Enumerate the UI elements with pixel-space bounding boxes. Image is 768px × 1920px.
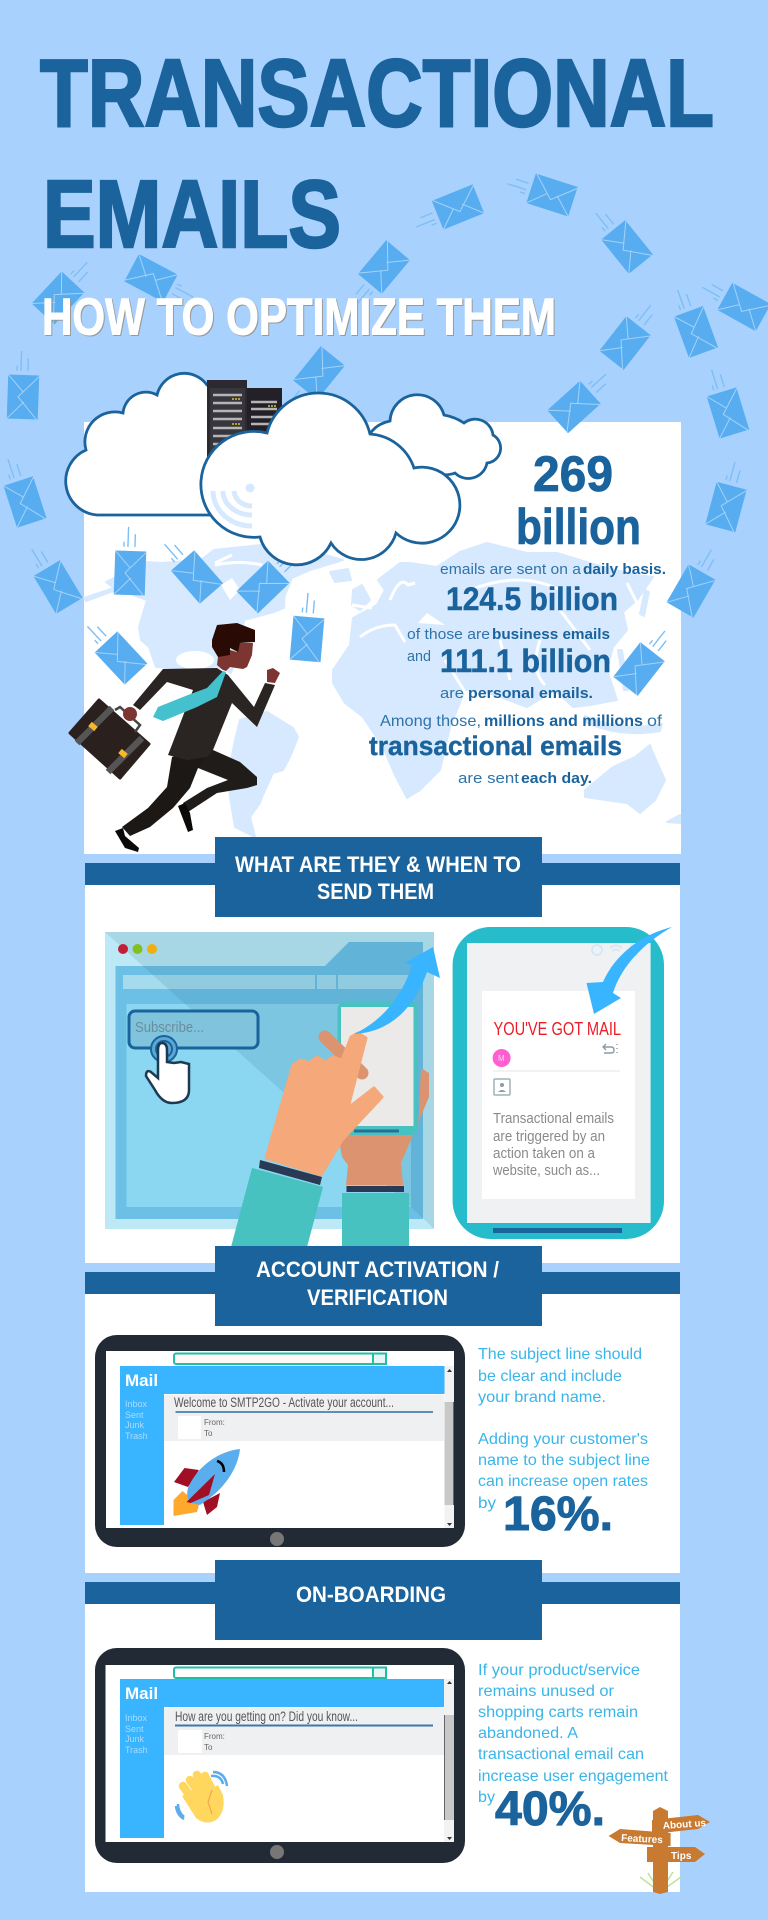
email header (164, 1395, 444, 1441)
stat text block: are sent (458, 770, 520, 787)
hand (123, 707, 137, 721)
status icons (592, 945, 637, 955)
email body (492, 1111, 614, 1179)
text: user engagement: If your product/service (478, 1662, 640, 1679)
email body: action taken on a (493, 1146, 596, 1162)
reply icon (603, 1044, 617, 1053)
email header: To (204, 1743, 213, 1752)
grass (640, 1872, 681, 1892)
title (40, 40, 714, 268)
fist (267, 668, 280, 683)
subtitle: HOW TO OPTIMIZE THEM (43, 290, 557, 348)
subscribe box (129, 1011, 258, 1048)
subtitle: HOW TO OPTIMIZE THEM (42, 288, 556, 346)
text: subject line tips: Adding your customer's (478, 1431, 648, 1448)
sender avatar: M (498, 1054, 505, 1063)
mail header: Mail (125, 1684, 158, 1703)
text: user engagement: by (478, 1789, 495, 1806)
stat text block: are (440, 685, 464, 702)
icon: wifi signal (213, 484, 254, 526)
illustration: phone with email (453, 927, 664, 1239)
email header: To (204, 1429, 213, 1438)
section header: account activation: VERIFICATION (307, 1285, 448, 1310)
stat text block: billion (516, 499, 641, 555)
email header: From: (204, 1418, 225, 1427)
mail sidebar: Sent (125, 1724, 144, 1734)
scrollbar (444, 1366, 454, 1528)
mail sidebar: Trash (125, 1431, 148, 1441)
illustration: running businessman (70, 623, 280, 852)
arrow: to browser (354, 947, 440, 1034)
email body: are triggered by an (493, 1129, 605, 1145)
sender avatar (493, 1049, 511, 1067)
section header: what are they: SEND THEM (317, 879, 434, 904)
stat text block: of those are (407, 626, 490, 643)
mail sidebar: Trash (125, 1745, 148, 1755)
stat text block: personal emails. (468, 685, 593, 702)
neck and face (217, 643, 253, 672)
section header: account activation: ACCOUNT ACTIVATION / (256, 1257, 499, 1282)
email header: How are you getting on? Did you know... (175, 1709, 358, 1724)
mail sidebar: Inbox (125, 1399, 148, 1409)
stat text block: and (407, 648, 431, 665)
section header: on-boarding: ON-BOARDING (296, 1582, 446, 1607)
text: user engagement: increase user engagement (478, 1768, 669, 1785)
stat text block: of (647, 713, 663, 730)
section header: account activation (85, 1246, 680, 1326)
section header: on-boarding (85, 1560, 680, 1640)
illustration: hands holding phone (231, 1002, 429, 1247)
illustration: browser window (105, 932, 434, 1229)
phone (338, 1002, 418, 1135)
mail header (120, 1679, 444, 1707)
mail header (120, 1366, 444, 1394)
text: user engagement: abandoned. A (478, 1725, 578, 1742)
text: subject line tips: 16%. (503, 1488, 613, 1541)
stat text block: transactional emails (369, 731, 622, 761)
email body: website, such as... (492, 1163, 600, 1179)
panel: what are they (85, 885, 680, 1263)
stat text block: 269 (533, 446, 613, 502)
email header: Welcome to SMTP2GO - Activate your account... (174, 1395, 394, 1410)
text: user engagement: shopping carts remain (478, 1704, 638, 1721)
stat text block: millions and millions (484, 713, 643, 730)
panel: account activation (85, 1294, 680, 1573)
contact icon (494, 1079, 510, 1095)
text: subject line tips: name to the subject line (478, 1452, 650, 1469)
text: subject line tips: be clear and include (478, 1368, 622, 1385)
stat text block: business emails (492, 626, 610, 643)
back hand (338, 1068, 429, 1185)
jacket (133, 668, 275, 760)
panel: statistics (84, 422, 681, 854)
text: user engagement: transactional email can (478, 1746, 644, 1763)
text: user engagement (478, 1662, 669, 1836)
shirt (208, 667, 232, 698)
front hand (266, 1033, 382, 1175)
cloud: front (201, 393, 460, 565)
mail header: Mail (125, 1371, 158, 1390)
title: EMAILS (43, 161, 341, 268)
text: subject line tips: The subject line should (478, 1346, 642, 1363)
window buttons (118, 944, 157, 954)
tablet: on-boarding email (95, 1648, 465, 1863)
stat text block: emails are sent on a (440, 561, 582, 578)
scrollbar (444, 1679, 454, 1842)
icon: rocket (174, 1449, 240, 1516)
icon: click hand (146, 1036, 189, 1103)
stat text block (369, 446, 666, 787)
email header (164, 1708, 444, 1755)
icon: waving hand (176, 1772, 227, 1823)
mail sidebar (120, 1707, 164, 1838)
stat text block: Among those, (380, 713, 481, 730)
tie (153, 671, 226, 721)
text: user engagement: 40%. (495, 1783, 605, 1836)
email heading: YOU'VE GOT MAIL (494, 1019, 621, 1039)
subscribe box: Subscribe... (135, 1019, 204, 1036)
mail sidebar: Inbox (125, 1713, 148, 1723)
map cut-outs (221, 578, 445, 625)
cloud: left (66, 373, 240, 515)
mail sidebar: Sent (125, 1410, 144, 1420)
mail sidebar (120, 1394, 164, 1525)
sign: about us: About us (662, 1818, 707, 1832)
cloud: right (370, 395, 501, 478)
text: user engagement: remains unused or (478, 1683, 615, 1700)
tablet: activation email (95, 1335, 465, 1547)
email body: Transactional emails (493, 1111, 614, 1127)
sleeves (231, 1168, 409, 1247)
post (653, 1807, 668, 1894)
back leg (172, 750, 257, 812)
shoes (115, 803, 193, 852)
front leg (122, 752, 210, 836)
briefcase (70, 700, 149, 778)
section header: what are they (85, 837, 680, 917)
text: subject line tips (478, 1346, 650, 1541)
text: subject line tips: by (478, 1495, 496, 1512)
email header: From: (204, 1732, 225, 1741)
stat text block: 111.1 billion (440, 643, 611, 679)
section header: what are they: WHAT ARE THEY & WHEN TO (235, 852, 521, 877)
arrow: to phone (586, 927, 672, 1014)
stat text block: 124.5 billion (446, 581, 618, 617)
mail sidebar: Junk (125, 1420, 145, 1430)
flying envelopes (0, 166, 768, 696)
stat text block: daily basis. (583, 561, 666, 578)
text: subject line tips: can increase open rates (478, 1473, 648, 1490)
panel: on-boarding (85, 1604, 680, 1892)
text: subject line tips: your brand name. (478, 1389, 606, 1406)
hair (212, 623, 255, 657)
search bar (174, 1668, 386, 1678)
icon: signpost (609, 1807, 710, 1894)
icon: servers (207, 380, 282, 480)
mail sidebar: Junk (125, 1734, 145, 1744)
world map (84, 543, 680, 837)
search bar (174, 1354, 386, 1364)
sign: features: Features (621, 1833, 663, 1846)
sign: tips: Tips (671, 1851, 692, 1862)
stat text block: each day. (521, 770, 592, 787)
